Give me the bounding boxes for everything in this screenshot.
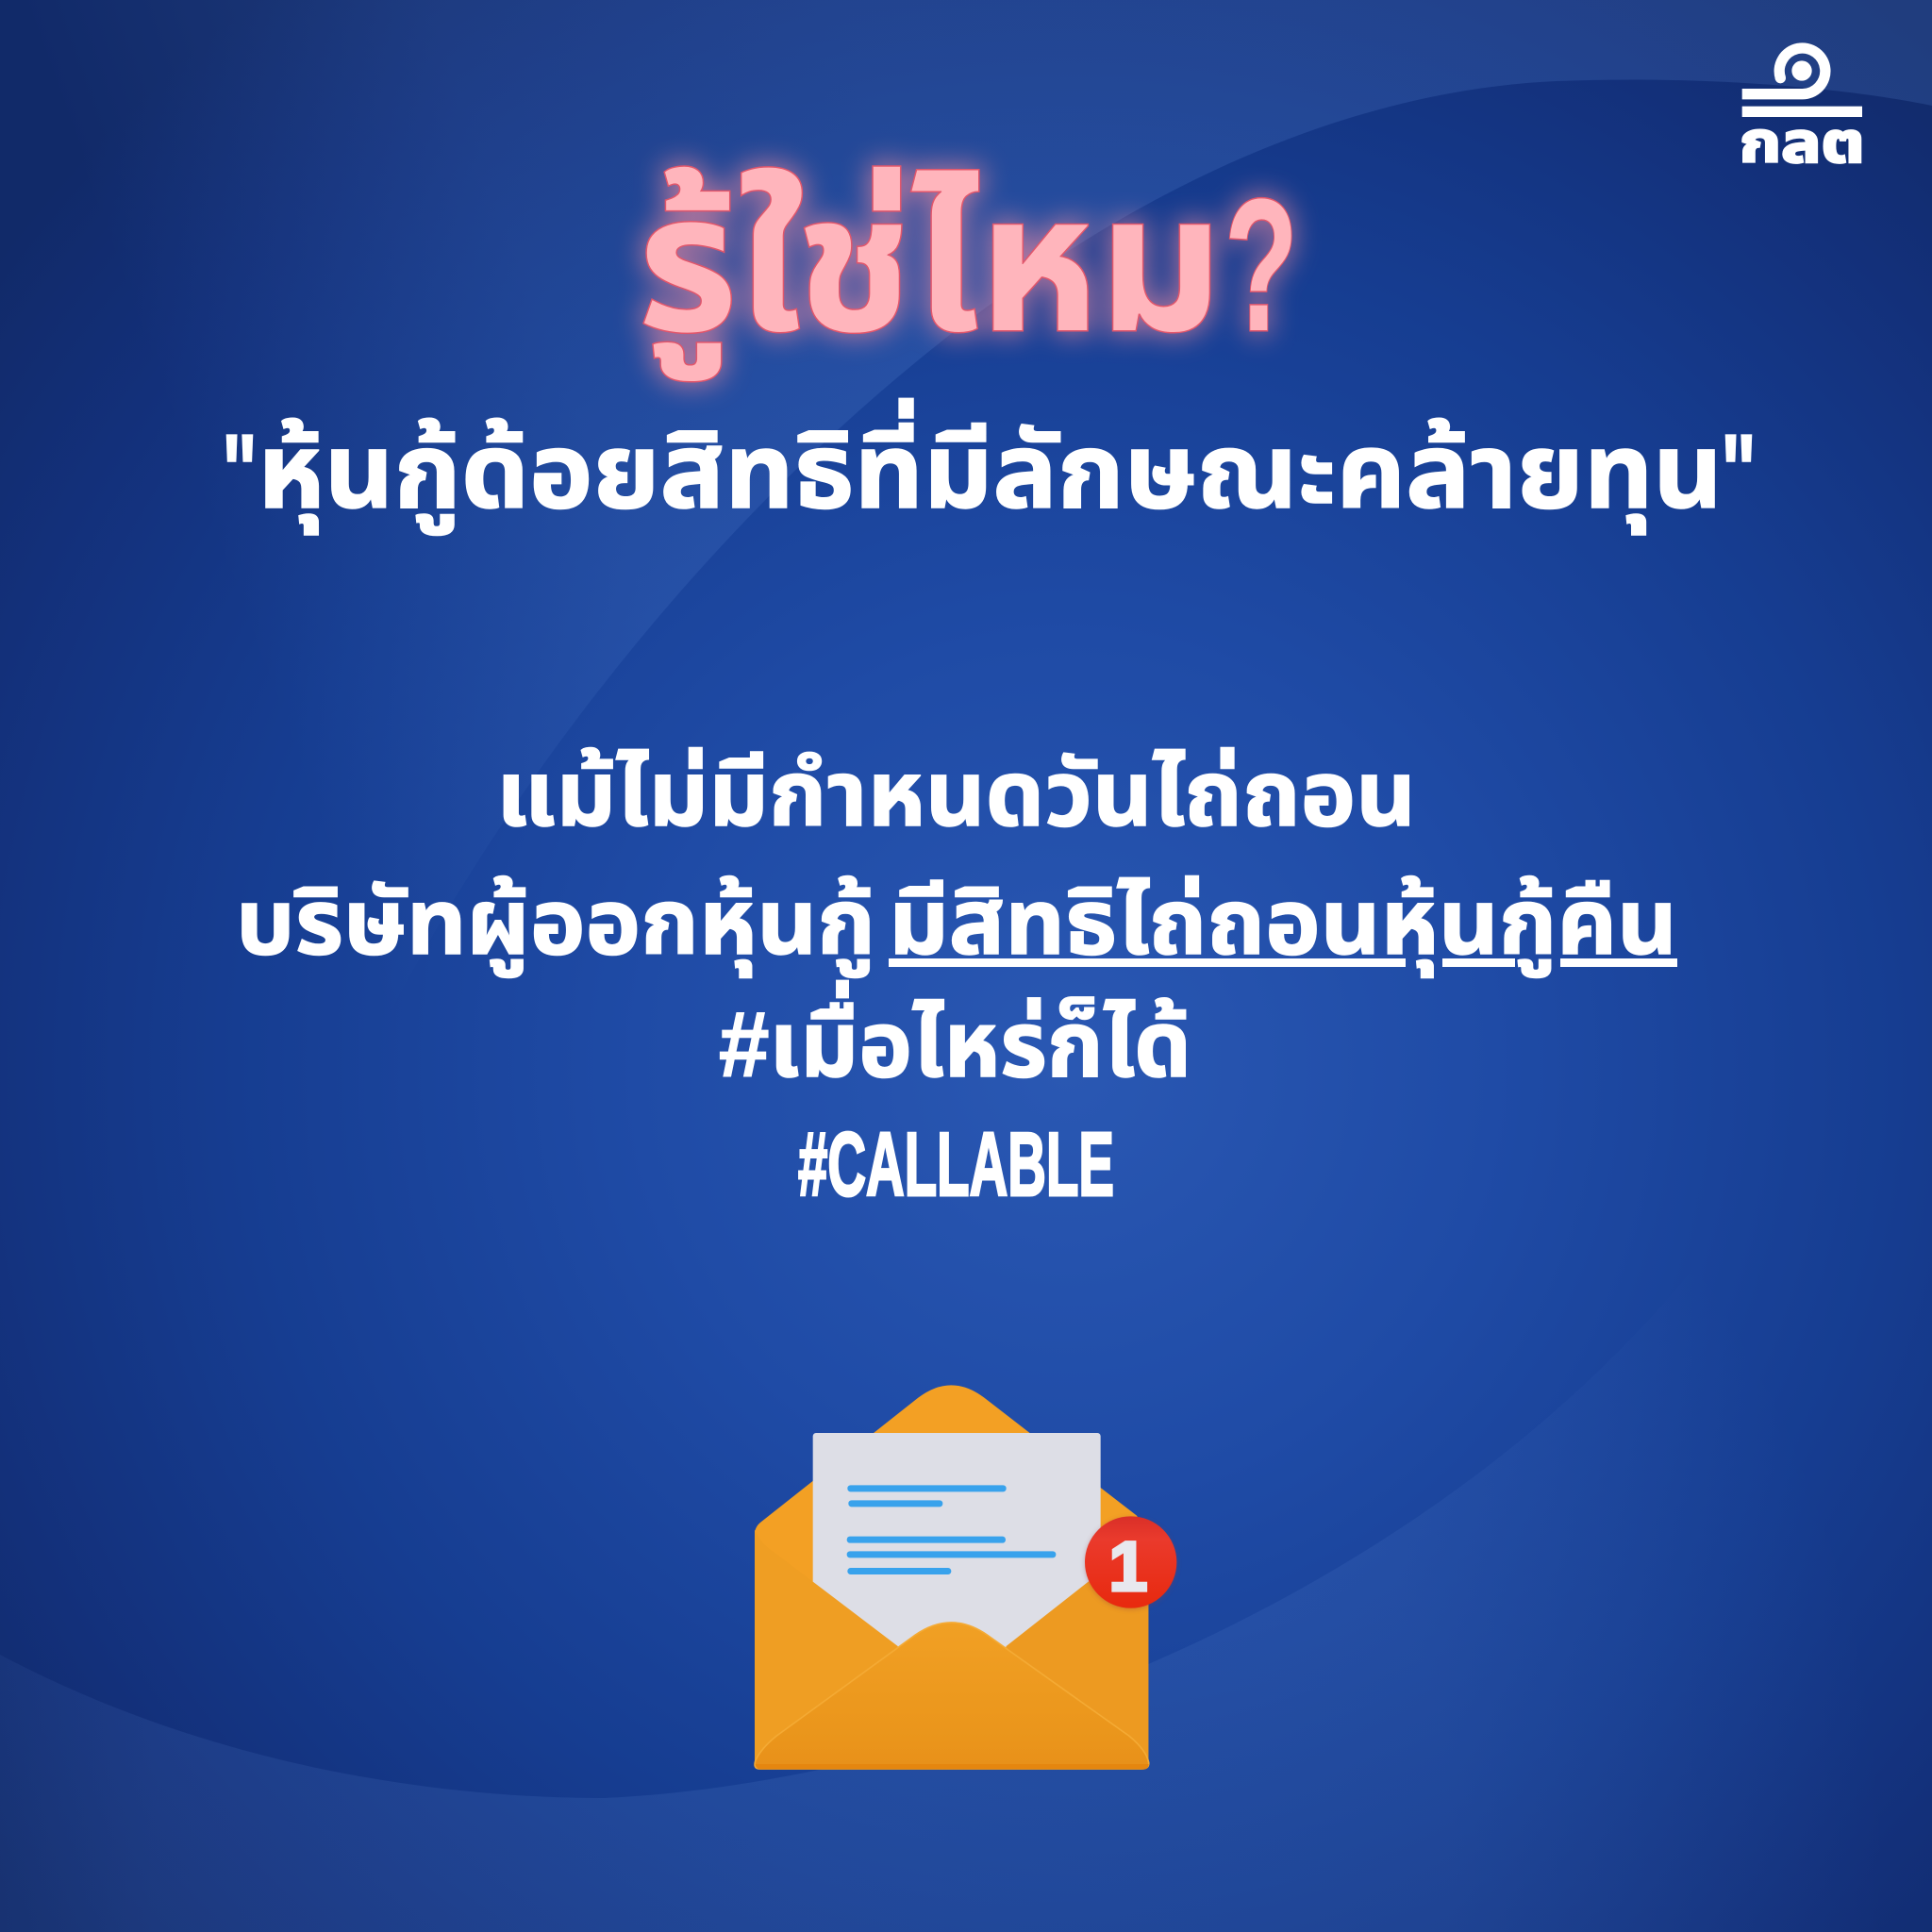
- body line 1: แม้ไม่มีกำหนดวันไถ่ถอน: [496, 742, 1416, 845]
- right side flap: [969, 1535, 1148, 1767]
- title text: ?: [1224, 160, 1298, 371]
- front flap: [755, 1623, 1149, 1769]
- envelope bottom rim: [756, 1764, 1149, 1770]
- body line 2: [236, 871, 1677, 978]
- subtitle: หุ้นกู้ด้อยสิทธิที่มีลักษณะคล้ายทุน: [258, 398, 1723, 535]
- body line 2: มีสิทธิไถ่ถอนหุ้นกู้คืน: [889, 871, 1677, 978]
- body line 2: บริษัทผู้ออกหุ้นกู้: [236, 871, 875, 978]
- left side flap: [755, 1530, 937, 1767]
- notification badge: [1085, 1516, 1176, 1609]
- logo dot: [1791, 60, 1812, 81]
- back flap: [755, 1385, 1148, 1764]
- underline: [889, 958, 1677, 967]
- title glow: ?: [1224, 160, 1298, 371]
- text lines: [847, 1485, 1056, 1574]
- logo bar: [1742, 107, 1862, 117]
- logo swirl: [1742, 48, 1825, 94]
- icon: envelope: [755, 1385, 1176, 1770]
- subtitle: ": [1721, 413, 1757, 530]
- title glow: รู้ใช่ไหม: [638, 157, 1223, 381]
- title text: รู้ใช่ไหม: [638, 157, 1223, 381]
- hashtag callable: #CALLABLE: [798, 1114, 1114, 1215]
- paper: [813, 1433, 1101, 1672]
- subtitle: ": [222, 413, 258, 530]
- hashtag thai: #เมื่อไหร่ก็ได้: [719, 980, 1191, 1096]
- logo: [1740, 48, 1865, 175]
- logo text: กลต: [1740, 111, 1865, 175]
- notification badge: 1: [1108, 1527, 1148, 1606]
- title: [638, 157, 1298, 381]
